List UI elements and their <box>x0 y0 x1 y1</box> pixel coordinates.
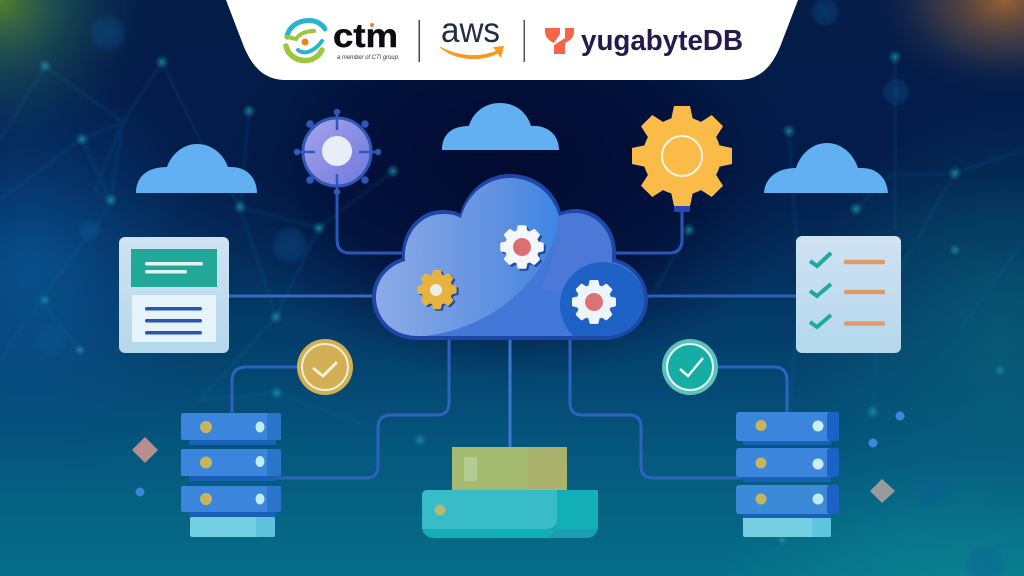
icon: small cloud left <box>136 144 257 193</box>
server unit 2 <box>181 449 281 476</box>
logo: ctm <box>286 17 399 61</box>
server unit 1 <box>181 413 281 440</box>
icon: white gear in badge <box>573 281 615 323</box>
decorative dot right upper <box>896 412 904 420</box>
decorative dot left <box>136 488 144 496</box>
server unit 2 <box>736 448 839 477</box>
logo: yugabyteDB: yugabyteDB <box>581 25 743 57</box>
storage box bottom center <box>422 447 598 538</box>
header logo panel <box>226 0 798 80</box>
panel: document card <box>119 237 229 353</box>
icon: gold check badge <box>297 339 353 395</box>
logo: aws: aws <box>441 11 500 50</box>
server unit 1 <box>736 412 839 441</box>
icon: gold gear in cloud <box>418 271 458 310</box>
decorative dot right lower <box>868 438 878 448</box>
decorative diamond left <box>132 437 158 463</box>
panel: checklist card <box>796 236 901 353</box>
icon: yellow gear <box>632 106 732 212</box>
icon: white gear in cloud <box>502 226 544 270</box>
server stack right <box>736 412 839 537</box>
icon: target gauge <box>295 110 380 194</box>
connector lines <box>229 190 796 478</box>
logo: ctm: a member of CTI group <box>337 55 399 61</box>
icon: small cloud center <box>442 103 559 150</box>
icon: small cloud right <box>764 143 888 193</box>
server stack left <box>181 413 281 537</box>
logo: ctm: ctm <box>333 17 398 54</box>
server unit 3 <box>736 485 839 514</box>
icon: teal check badge <box>662 339 718 395</box>
main cloud <box>372 174 650 348</box>
server unit 3 <box>181 486 281 512</box>
decorative diamond right <box>870 479 895 503</box>
